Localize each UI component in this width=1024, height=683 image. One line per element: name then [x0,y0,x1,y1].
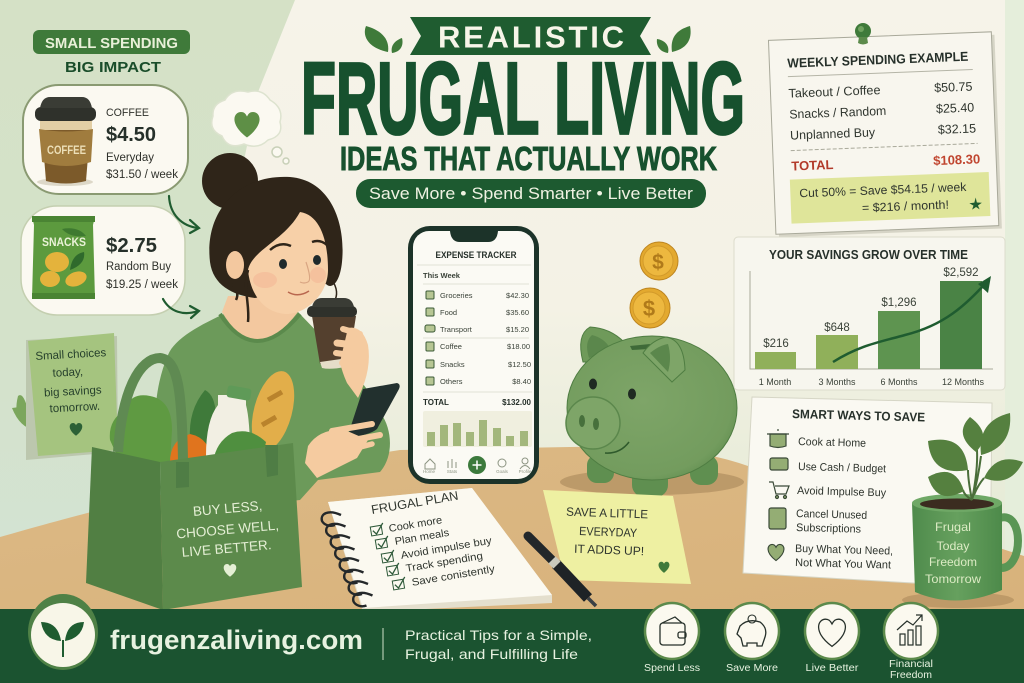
expense rows: $35.60 [506,308,529,317]
shopping bag with groceries: BUY LESS, [192,498,263,519]
chart: savings growth [734,237,1005,390]
chart: savings growth: 3 Months [818,377,856,387]
handle [118,358,183,462]
note: small choices: tomorrow. [49,401,100,415]
expense rows: $8.40 [512,377,531,386]
card: coffee: $31.50 / week [106,169,178,181]
website name: frugenzaliving.com [110,625,363,655]
card: snacks: $2.75 [106,235,157,257]
card: smart ways to save: Use Cash / Budget [798,461,886,475]
card: smart ways to save: Buy What You Need, [795,543,893,558]
card: smart ways to save: Cancel Unused [796,508,867,522]
chart: savings growth: $216 [763,338,789,350]
expense rows: Coffee [440,342,462,351]
bag body [160,443,302,610]
shopping bag with groceries: LIVE BETTER. [181,537,272,560]
sticky note: save a little: EVERYDAY [579,524,637,540]
phone: expense tracker: TOTAL [423,398,449,407]
sticky note: save a little: IT ADDS UP! [574,542,644,558]
heading: small spending big impact [33,30,190,76]
card: snacks [21,206,185,315]
expense rows: Groceries [440,291,473,300]
sweater [155,312,390,510]
card: weekly spending example: Takeout / Coffee [788,83,881,101]
badge: financial freedom [884,603,938,681]
mug with plant: Frugal [935,520,971,534]
shopping bag with groceries: CHOOSE WELL, [176,518,279,541]
card: weekly spending example: WEEKLY SPENDING EXAMPLE [787,49,969,71]
card: weekly spending example: $32.15 [938,121,976,137]
hair and head [202,153,343,322]
icon: coffee cup [35,97,96,186]
card: smart ways to save: SMART WAYS TO SAVE [792,407,925,424]
thought bubble with heart [212,91,289,164]
card: smart ways to save: Cook at Home [798,436,866,450]
coins [630,242,678,328]
heading: small spending big impact: BIG IMPACT [65,59,161,76]
badge: financial freedom: Freedom [890,670,932,681]
checklist: Cook more [388,514,443,535]
card: weekly spending example: Cut 50% = Save $54.15 / week [799,180,968,200]
mug with plant [902,413,1023,608]
mini bar chart [423,411,532,447]
chart: savings growth: $1,296 [881,297,917,309]
coins: $ [652,251,664,274]
growth arrow [833,276,991,362]
phone: expense tracker: $132.00 [502,398,532,407]
card: weekly spending example: = $216 / month! [862,198,949,215]
arrow: snacks to woman [163,299,199,318]
checklist: Avoid impulse buy [400,535,493,562]
tagline pill [356,179,706,208]
note: small choices [12,333,118,460]
expense rows: Transport [440,325,473,334]
pushpin [855,23,871,44]
pen [528,536,596,606]
phone nav bar: Home [423,469,435,474]
phone in hand [347,383,400,438]
note: small choices: today, [52,366,83,380]
notebook: frugal plan: FRUGAL PLAN [370,489,459,517]
expense rows: Food [440,308,457,317]
card: smart ways to save: Avoid Impulse Buy [797,485,887,499]
neck and collar [220,296,300,341]
card: snacks: $19.25 / week [106,279,178,291]
chart: savings growth: 1 Month [759,377,791,387]
notebook: frugal plan [322,488,552,612]
expense rows [425,291,531,386]
footer tagline: Frugal, and Fulfilling Life [405,646,578,662]
card: coffee: Everyday [106,152,154,164]
card: weekly spending example: $50.75 [934,80,973,95]
note: small choices: big savings [44,384,102,400]
icon: right leaves [657,26,691,53]
phone nav bar: Stats [447,469,458,474]
sticky note: save a little: SAVE A LITTLE [566,505,648,521]
card: weekly spending example: Unplanned Buy [790,125,876,143]
ribbon: realistic: REALISTIC [438,20,624,54]
expense rows: $15.20 [506,325,529,334]
mug with plant: Tomorrow [925,572,981,586]
groceries [110,366,302,462]
shopping bag with groceries [86,358,302,610]
checklist: Plan meals [394,527,450,548]
coins: $ [643,296,655,321]
plant [928,413,1023,500]
phone nav bar: Profile [519,469,532,474]
expense rows: Others [440,377,463,386]
badge: live better: Live Better [806,663,859,674]
card: smart ways to save: Not What You Want [795,557,891,572]
chart: savings growth: 12 Months [942,377,985,387]
card: coffee: $4.50 [106,124,156,146]
card: weekly spending example: $108.30 [933,151,980,168]
card: smart ways to save: Subscriptions [796,522,862,536]
coffee cup in hand [307,298,369,398]
subtitle: IDEAS THAT ACTUALLY WORK [340,140,717,177]
checklist [370,513,496,592]
mug with plant: Freedom [929,555,977,569]
sticky note: save a little [543,490,691,584]
logo [28,594,98,670]
expense rows: Snacks [440,360,465,369]
footer tagline: Practical Tips for a Simple, [405,627,592,643]
list icons [767,429,789,561]
expense rows: $12.50 [508,360,531,369]
phone: expense tracker: This Week [423,271,461,280]
card: coffee [23,85,188,194]
spiral binding [322,512,372,606]
checklist: Track spending [405,550,484,575]
badge: spend less: Spend Less [644,663,700,674]
expense rows: $42.30 [506,291,529,300]
arrow: coffee to woman [169,196,199,233]
card: coffee: COFFEE [106,107,149,119]
badge: spend less [644,603,700,674]
card: weekly spending example: $25.40 [936,101,975,116]
card: smart ways to save [743,397,992,590]
card: weekly spending example [768,32,1002,237]
chart: savings growth: $648 [824,322,850,334]
chart: savings growth: 6 Months [880,377,918,387]
phone nav bar: Goals [496,469,509,474]
icon: coffee cup: COFFEE [47,143,86,157]
heading: small spending big impact: SMALL SPENDING [45,35,178,52]
icon: left leaves [365,26,403,53]
desk [0,447,1024,612]
badge: save more: Save More [726,663,778,674]
card: weekly spending example: Snacks / Random [789,104,887,122]
icon: snack bag: SNACKS [42,235,86,249]
footer tagline [405,627,592,662]
card: snacks: Random Buy [106,261,171,273]
phone: expense tracker [408,226,539,484]
hand [305,424,380,478]
chart: savings growth: $2,592 [943,267,979,279]
checklist: Save conistently [411,563,496,589]
badge: save more [725,603,779,674]
mug with plant: Today [936,539,970,553]
heading block [301,17,745,208]
phone: expense tracker: EXPENSE TRACKER [436,250,517,261]
icon: snack bag [32,216,95,299]
tagline pill: Save More • Spend Smarter • Live Better [369,184,693,203]
expense rows: $18.00 [507,342,530,351]
note: small choices: Small choices [35,347,107,363]
badge: live better [805,603,859,674]
woman [155,153,400,510]
card: weekly spending example: TOTAL [791,157,834,174]
piggy bank [560,327,744,497]
footer [0,594,1024,683]
phone nav bar [423,456,532,474]
chart: savings growth: YOUR SAVINGS GROW OVER TIME [769,248,968,262]
badge: financial freedom: Financial [889,659,933,670]
